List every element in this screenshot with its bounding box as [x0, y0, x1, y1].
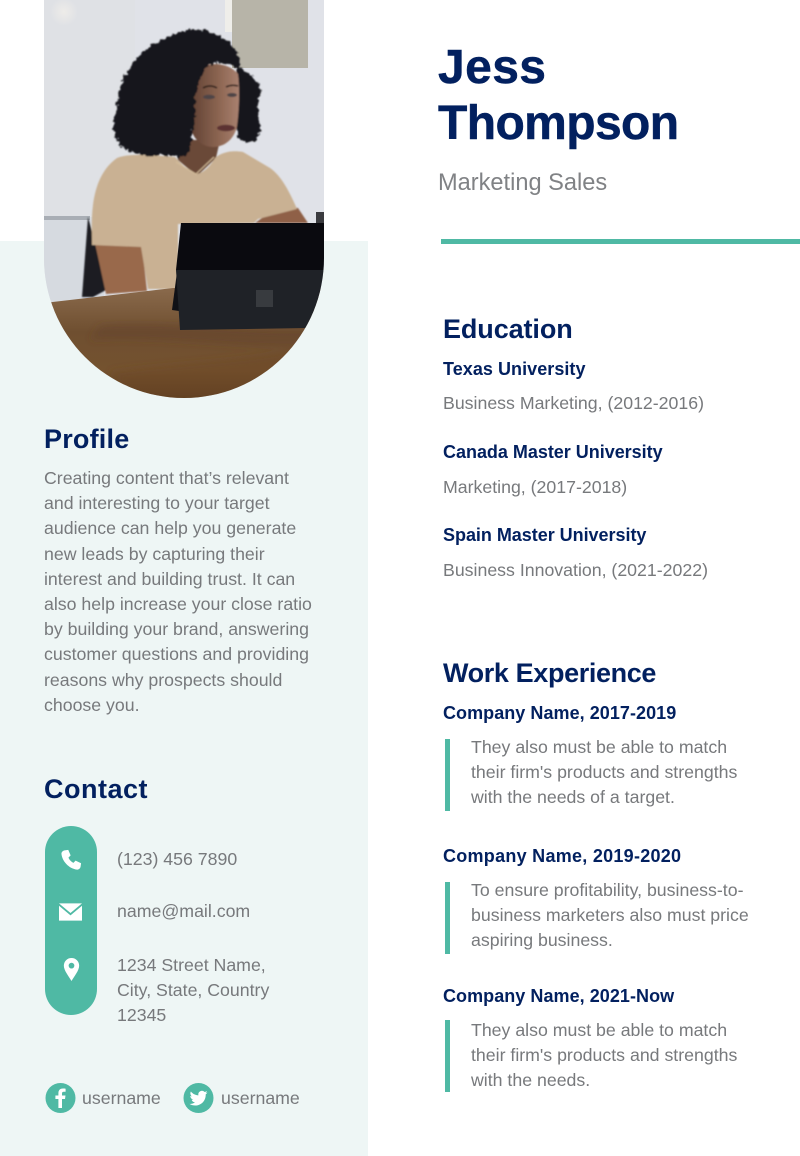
heading: name: [438, 41, 678, 150]
text: degree 2: Marketing, (2017-2018): [443, 477, 627, 497]
icon: twitter: [184, 1083, 214, 1113]
walls: [104, 0, 324, 296]
kickstand: [172, 276, 179, 311]
text: job 2 description: [471, 880, 749, 950]
text: job 3 description: their firm's products and strengths: [471, 1045, 737, 1065]
text: profile body: by building your brand, answering: [44, 619, 309, 639]
text: profile body: Creating content that’s relevant: [44, 468, 289, 488]
text: address: City, State, Country: [117, 980, 269, 1000]
text: profile body: audience can help you generate: [44, 518, 296, 538]
text: profile body: customer questions and providing: [44, 644, 309, 664]
text: job 2 description: To ensure profitability, business-to-: [471, 880, 743, 900]
text: facebook username: username: [82, 1088, 161, 1108]
chair: [82, 217, 106, 297]
text: twitter username: username: [221, 1088, 300, 1108]
text: profile body: choose you.: [44, 695, 140, 715]
text: job 1 description: [471, 737, 737, 807]
back hair: [232, 68, 261, 143]
eyes, nose shadow, lips: [203, 95, 215, 99]
text: address: [117, 955, 270, 1025]
text: job 3 description: with the needs.: [471, 1070, 590, 1090]
text: profile body: [44, 468, 312, 715]
text: job 1 description: with the needs of a target.: [471, 787, 675, 807]
text: job 2 description: business marketers also must price: [471, 905, 749, 925]
laptop: [176, 223, 324, 270]
text: profile body: also help increase your close ratio: [44, 594, 312, 614]
heading: Work Experience: Work Experience: [443, 658, 656, 688]
heading: name: Jess: [438, 41, 546, 94]
divider: teal rule: [441, 239, 800, 244]
panel: left sidebar background: [0, 241, 368, 1156]
text: address: 1234 Street Name,: [117, 955, 266, 975]
text: school 2: Canada Master University: [443, 442, 663, 462]
icon: envelope: [59, 903, 82, 921]
text: job 1 description: They also must be able to match: [471, 737, 727, 757]
text: job 2 title: Company Name, 2019-2020: [443, 846, 681, 866]
text: profile body: new leads by capturing their: [44, 544, 265, 564]
text: profile body: reasons why prospects should: [44, 670, 282, 690]
text: job 2 description: aspiring business.: [471, 930, 613, 950]
icon: map pin: [64, 958, 80, 981]
icon: facebook: [46, 1083, 76, 1113]
text: profile body: and interesting to your target: [44, 493, 270, 513]
icon: phone: [61, 850, 82, 870]
text: school 3: Spain Master University: [443, 525, 646, 545]
necklace: [186, 156, 215, 175]
photo: woman at a laptop: [44, 0, 324, 398]
text: job 1 title: Company Name, 2017-2019: [443, 703, 676, 723]
heading: Profile: Profile: [44, 424, 129, 454]
shirt: [92, 151, 297, 289]
text: profile body: interest and building trust. It can: [44, 569, 295, 589]
face: [190, 64, 239, 147]
text: degree 3: Business Innovation, (2021-2022): [443, 560, 708, 580]
table: [44, 288, 324, 398]
heading: Education: Education: [443, 314, 573, 344]
text: job 3 title: Company Name, 2021-Now: [443, 986, 674, 1006]
text: job 3 description: [471, 1020, 737, 1090]
text: email: name@mail.com: [117, 901, 250, 921]
neck: [175, 140, 220, 176]
accent bar: job 1: [445, 739, 450, 811]
hair: [113, 30, 241, 157]
arms: [95, 243, 147, 294]
panel: contact icon pill: [45, 826, 97, 1015]
heading: name: Thompson: [438, 97, 678, 150]
accent bar: job 2: [445, 882, 450, 954]
heading: Contact: Contact: [44, 774, 148, 804]
text: job 3 description: They also must be able to match: [471, 1020, 727, 1040]
text: phone: (123) 456 7890: [117, 849, 237, 869]
text: degree 1: Business Marketing, (2012-2016): [443, 393, 704, 413]
accent bar: job 3: [445, 1020, 450, 1092]
text: job title: Marketing Sales: [438, 170, 607, 196]
text: job 1 description: their firm's products and strengths: [471, 762, 737, 782]
text: school 1: Texas University: [443, 359, 586, 379]
text: address: 12345: [117, 1005, 166, 1025]
